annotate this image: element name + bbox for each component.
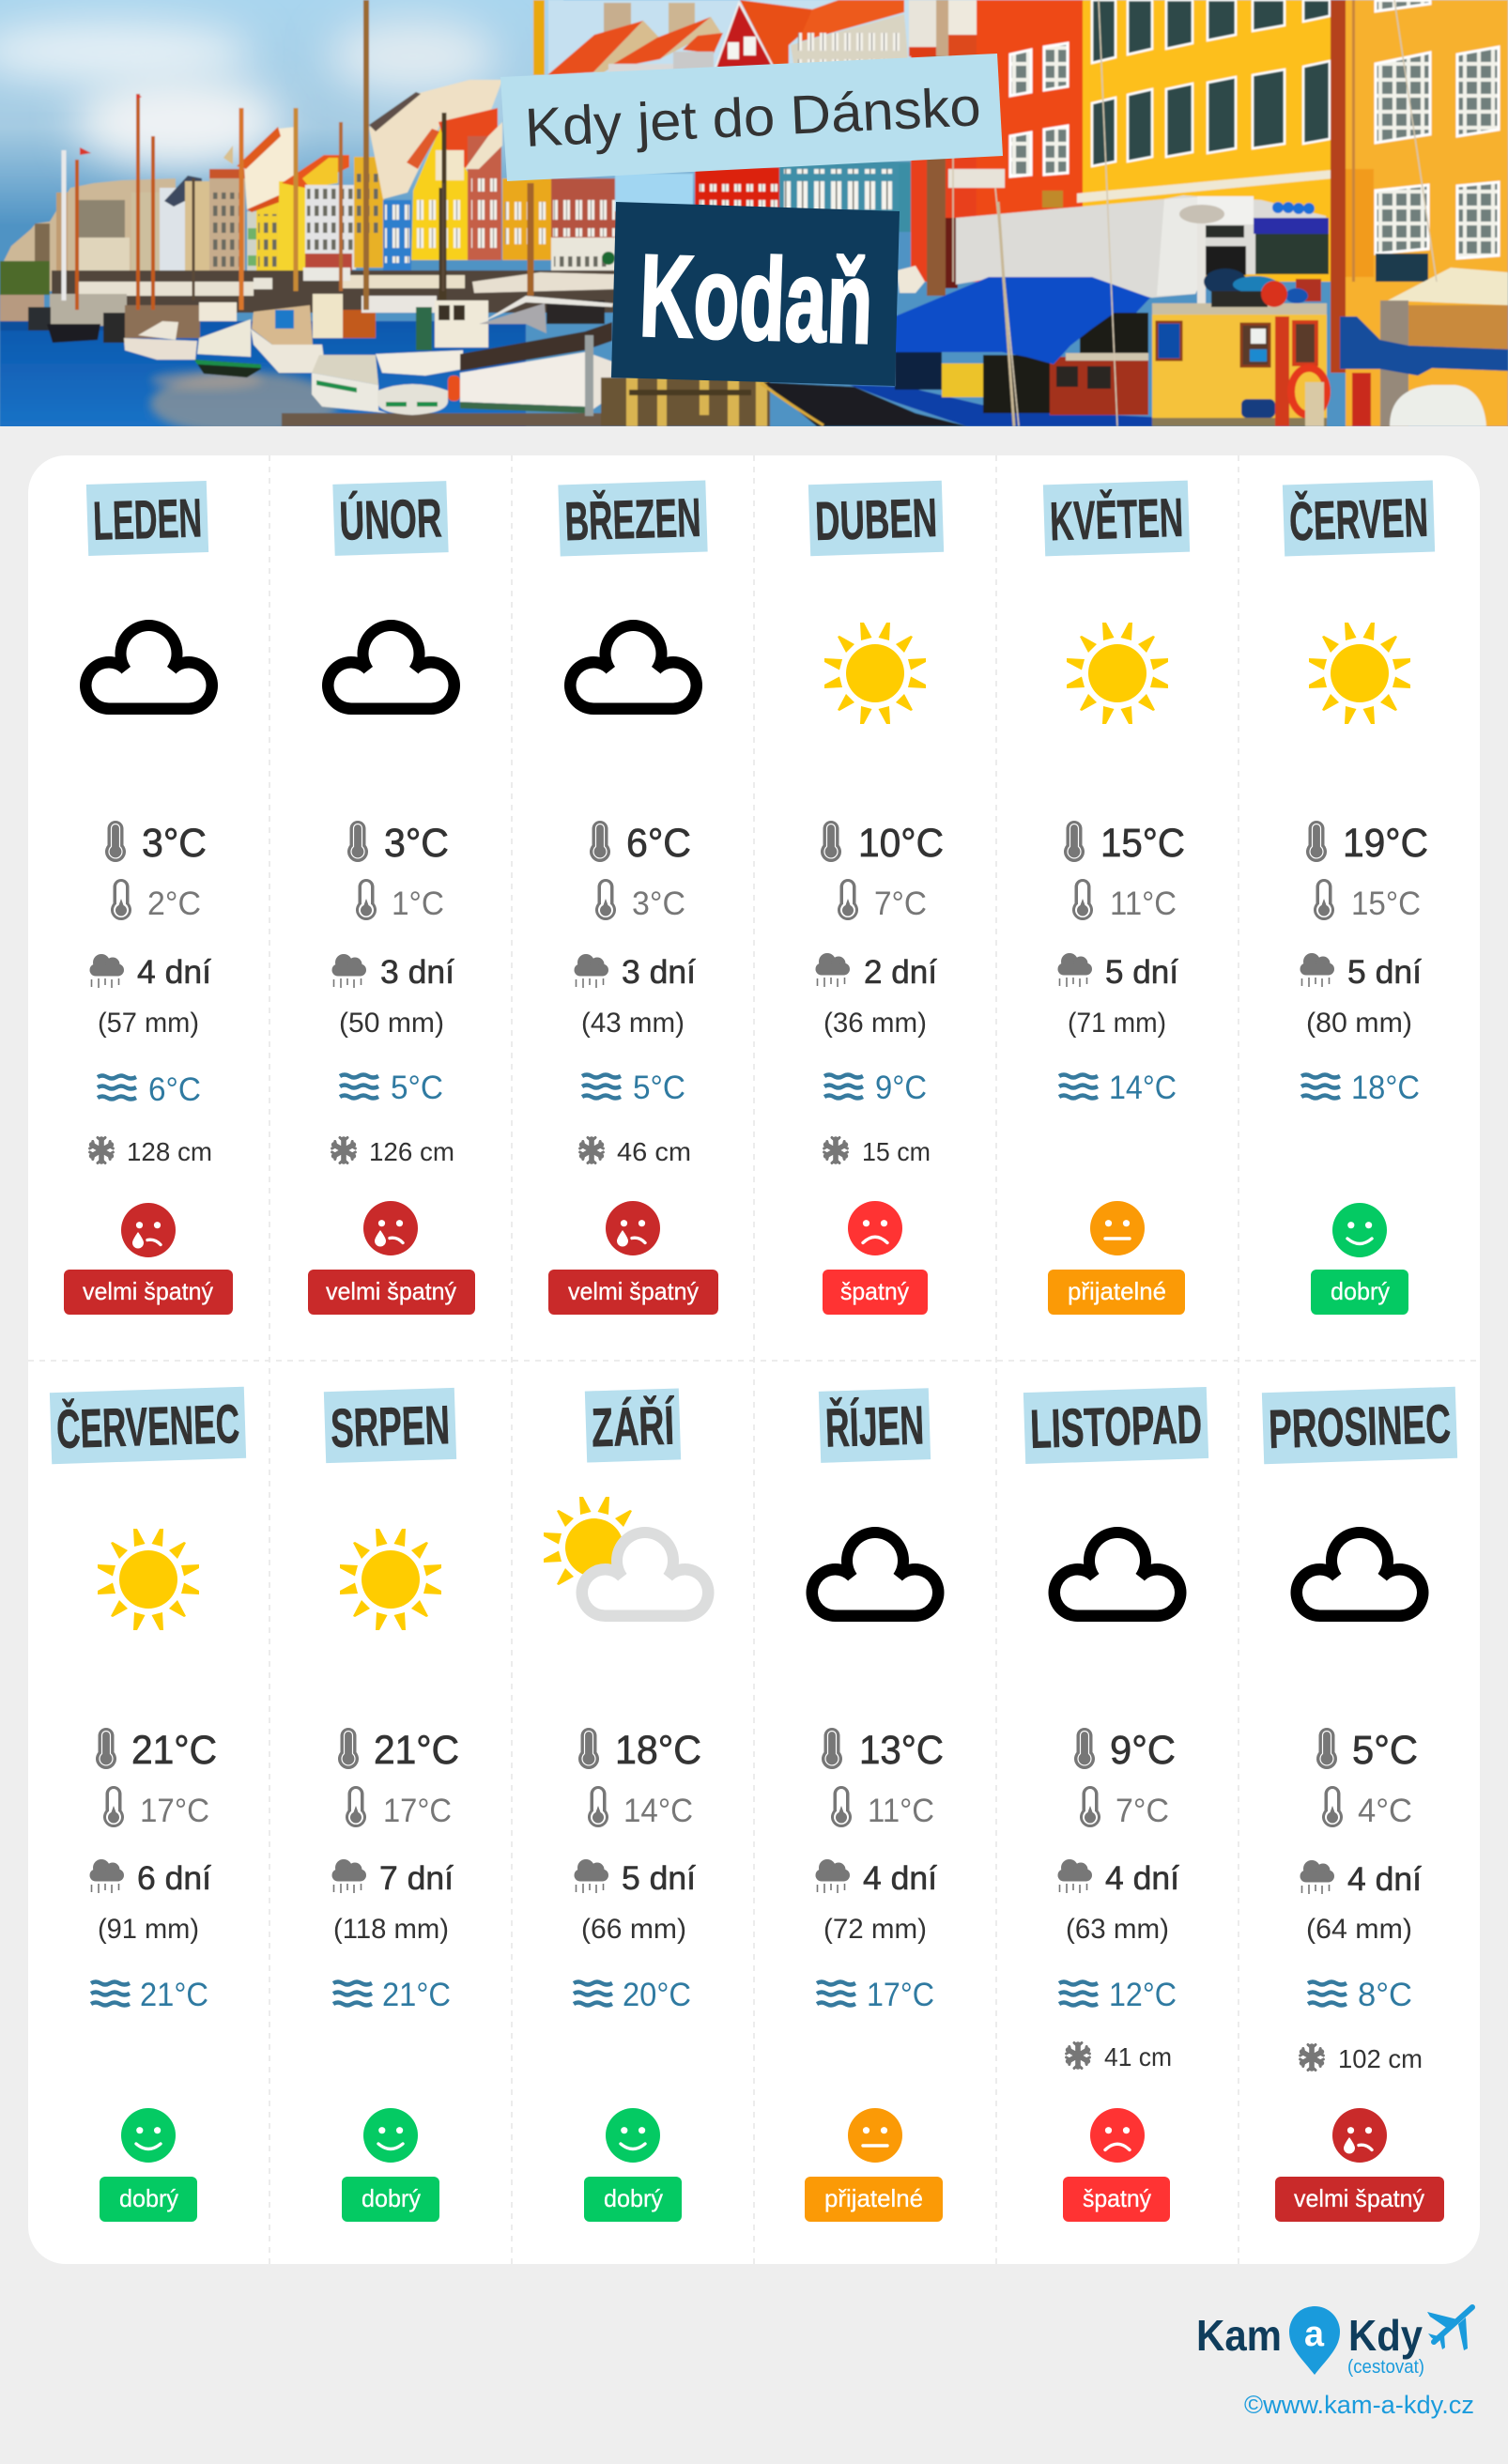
month label: [1043, 481, 1190, 556]
rating: [1063, 2108, 1170, 2222]
panel: Říjen: [805, 1388, 945, 2222]
rating: dobrý: [1331, 1277, 1390, 1305]
month label: KVĚTEN: [1049, 487, 1184, 552]
max temperature: 3°C: [384, 821, 449, 866]
icon: sun: [98, 1529, 199, 1630]
panel: Září: [544, 1388, 714, 2222]
water temperature: 21°C: [140, 1977, 208, 2013]
water temperature: 17°C: [867, 1977, 934, 2013]
min temperature: [1080, 1786, 1169, 1829]
rainfall: (118 mm): [333, 1914, 449, 1945]
rainy days: [90, 954, 211, 991]
min temperature: [103, 1786, 209, 1829]
max temperature: [821, 821, 944, 866]
max temperature: 10°C: [858, 821, 944, 866]
min temperature: [346, 1786, 452, 1829]
snow depth: 128 cm: [127, 1137, 212, 1166]
roof load: [1204, 269, 1247, 295]
min temperature: [588, 1786, 693, 1829]
rating: [100, 2108, 197, 2222]
water temperature: [1301, 1070, 1420, 1106]
snow depth: [824, 1137, 931, 1166]
umbrellas right: [1388, 268, 1508, 305]
rainy days: [815, 1859, 937, 1897]
white fender: [1390, 385, 1486, 426]
title box: Kodaň: Kodaň: [638, 231, 875, 368]
rating: [308, 1201, 475, 1315]
snow depth: 126 cm: [369, 1137, 454, 1166]
panel: Prosinec: [1262, 1387, 1457, 2222]
rainfall: (50 mm): [339, 1008, 444, 1039]
panel: Červenec: [50, 1387, 246, 2222]
logo: Kam a Kdy: [1196, 2306, 1472, 2378]
water temperature: 20°C: [623, 1977, 691, 2013]
water temperature: [582, 1070, 685, 1106]
max temperature: 18°C: [615, 1728, 701, 1773]
orange building: [1346, 0, 1508, 426]
month label: ČERVENEC: [55, 1394, 240, 1460]
rainy days: [90, 1859, 211, 1897]
icon: map pin: [1289, 2306, 1340, 2375]
rainfall: (91 mm): [98, 1914, 199, 1945]
rating: [584, 2108, 682, 2222]
max temperature: [105, 821, 207, 866]
water: [0, 321, 526, 434]
max temperature: 21°C: [131, 1728, 217, 1773]
max temperature: [590, 821, 691, 866]
icon: sun behind cloud: [544, 1497, 714, 1622]
rainy days: 4 dní: [1347, 1861, 1422, 1898]
min temperature: 1°C: [392, 886, 444, 922]
rating: dobrý: [119, 2184, 178, 2212]
water temperature: [1059, 1977, 1177, 2013]
rating: [1311, 1203, 1408, 1315]
rainy days: [332, 954, 454, 991]
month label: LISTOPAD: [1029, 1394, 1203, 1460]
rating: špatný: [840, 1277, 909, 1305]
roofs top middle: [548, 0, 924, 77]
rainy days: 5 dní: [622, 1860, 696, 1897]
rating: velmi špatný: [1294, 2184, 1424, 2212]
rainy days: [575, 1859, 696, 1897]
rainfall: (66 mm): [581, 1914, 686, 1945]
rainy days: 3 dní: [622, 954, 696, 991]
rating: velmi špatný: [326, 1277, 456, 1305]
month label: [1023, 1387, 1208, 1464]
rainy days: 2 dní: [864, 954, 937, 991]
rainfall: (71 mm): [1068, 1008, 1166, 1039]
min temperature: [838, 879, 927, 922]
max temperature: 5°C: [1352, 1728, 1418, 1773]
rainfall: (36 mm): [823, 1008, 927, 1039]
month label: [585, 1388, 681, 1463]
month label: [808, 481, 944, 556]
snow depth: 46 cm: [617, 1137, 691, 1166]
rainfall: (80 mm): [1306, 1008, 1412, 1039]
water temperature: 21°C: [382, 1977, 451, 2013]
max temperature: [96, 1728, 217, 1773]
yellow cabin: [1152, 313, 1327, 418]
month label: ÚNOR: [339, 487, 443, 552]
rainy days: [1057, 1859, 1179, 1897]
rainy days: [1300, 1860, 1422, 1898]
red building: [909, 54, 982, 284]
snow depth: [1300, 2044, 1423, 2073]
title label: Kdy jet do Dánsko: [500, 54, 1003, 181]
max temperature: [1316, 1728, 1418, 1773]
max temperature: [822, 1728, 944, 1773]
truck: [956, 195, 1329, 298]
min temperature: 17°C: [383, 1793, 452, 1829]
min temperature: 4°C: [1358, 1793, 1412, 1829]
panel: Listopad: [1023, 1387, 1208, 2222]
min temperature: [1072, 879, 1177, 922]
rainy days: [332, 1859, 454, 1897]
min temperature: [1314, 879, 1421, 922]
max temperature: [338, 1728, 459, 1773]
rainfall: (63 mm): [1066, 1914, 1169, 1945]
rainy days: 6 dní: [137, 1860, 211, 1897]
panel: Leden: [64, 481, 233, 1315]
snow depth: [90, 1137, 212, 1166]
water temperature: 12°C: [1109, 1977, 1177, 2013]
min temperature: 7°C: [874, 886, 927, 922]
yellow building: [1083, 0, 1352, 282]
month label: [1283, 481, 1435, 556]
title label: Kdy jet do Dánsko: Kdy jet do Dánsko: [524, 76, 982, 159]
water temperature: 14°C: [1109, 1070, 1177, 1106]
water temperature: 9°C: [875, 1070, 927, 1106]
max temperature: 3°C: [142, 821, 207, 866]
icon: sun: [824, 623, 926, 724]
month label: ŘÍJEN: [824, 1394, 925, 1459]
rainy days: 7 dní: [379, 1860, 454, 1897]
panel: Březen: [548, 481, 718, 1315]
icon: cloud: [806, 1527, 945, 1622]
month label: [819, 1388, 931, 1463]
min temperature: 15°C: [1351, 886, 1421, 922]
panel: Srpen: [324, 1388, 459, 2222]
rainfall: (64 mm): [1306, 1914, 1412, 1945]
max temperature: [347, 821, 449, 866]
month label: [50, 1387, 246, 1464]
icon: cloud: [1290, 1527, 1429, 1622]
snow depth: 41 cm: [1104, 2042, 1172, 2071]
water temperature: [1059, 1070, 1177, 1106]
rainfall: (57 mm): [98, 1008, 199, 1039]
min temperature: [1322, 1786, 1412, 1829]
big white boat: [479, 303, 546, 333]
water temperature: [574, 1977, 691, 2013]
blue tarps: [895, 277, 1150, 364]
icon: cloud: [1048, 1527, 1187, 1622]
water temperature: [1308, 1977, 1412, 2013]
water temperature: [817, 1977, 934, 2013]
rating: [805, 2108, 943, 2222]
logo: Kam a Kdy: Kdy: [1348, 2311, 1423, 2360]
panel: Únor: [308, 481, 475, 1315]
panel: Květen: [1043, 481, 1190, 1315]
rating: [64, 1203, 233, 1315]
rainy days: 4 dní: [1105, 1860, 1179, 1897]
month label: [86, 481, 208, 556]
max temperature: 9°C: [1110, 1728, 1176, 1773]
rating: dobrý: [604, 2184, 663, 2212]
rainfall: (72 mm): [823, 1914, 927, 1945]
water temperature: [824, 1070, 927, 1106]
header photo: Nyhavn harbour: [0, 0, 1508, 451]
min temperature: 14°C: [623, 1793, 693, 1829]
water temperature: [333, 1977, 451, 2013]
min temperature: [111, 879, 201, 922]
rating: [1048, 1201, 1185, 1315]
max temperature: [1306, 821, 1428, 866]
rating: [342, 2108, 439, 2222]
max temperature: 6°C: [626, 821, 691, 866]
min temperature: 7°C: [1116, 1793, 1169, 1829]
icon: map pin: a: [1304, 2315, 1325, 2354]
month label: SRPEN: [330, 1394, 451, 1459]
min temperature: 2°C: [147, 886, 201, 922]
white card panel: [28, 455, 1480, 2264]
rainy days: 4 dní: [137, 954, 211, 991]
water temperature: 6°C: [148, 1071, 201, 1108]
masts: [64, 0, 1437, 426]
rating: přijatelné: [1068, 1277, 1166, 1305]
max temperature: [578, 1728, 701, 1773]
max temperature: 13°C: [859, 1728, 944, 1773]
under tarp: [895, 352, 942, 390]
icon: sun: [1067, 623, 1168, 724]
month label: ZÁŘÍ: [591, 1395, 676, 1458]
rainy days: 5 dní: [1105, 954, 1178, 991]
month label: DUBEN: [814, 487, 938, 552]
rating: přijatelné: [824, 2184, 923, 2212]
max temperature: 21°C: [374, 1728, 459, 1773]
icon: cloud: [564, 620, 702, 715]
website url: ©www.kam-a-kdy.cz: [1244, 2391, 1474, 2419]
water temperature: [340, 1070, 443, 1106]
panel: Duben: [808, 481, 944, 1315]
icon: sun: [1309, 623, 1410, 724]
min temperature: [356, 879, 444, 922]
snow depth: [332, 1137, 454, 1166]
logo: Kam a Kdy: Kam: [1196, 2311, 1282, 2360]
max temperature: [1074, 1728, 1176, 1773]
rainy days: [815, 953, 937, 991]
under Kodaň: [601, 377, 770, 426]
rainy days: 4 dní: [863, 1860, 937, 1897]
min temperature: 17°C: [140, 1793, 209, 1829]
min temperature: 3°C: [632, 886, 685, 922]
max temperature: [1064, 821, 1185, 866]
rainy days: 5 dní: [1347, 954, 1422, 991]
month label: BŘEZEN: [564, 487, 702, 552]
icon: sun: [340, 1529, 441, 1630]
max temperature: 15°C: [1100, 821, 1185, 866]
icon: cloud: [80, 620, 218, 715]
rating: [1275, 2108, 1444, 2222]
water temperature: [91, 1977, 208, 2013]
snow depth: [1067, 2042, 1172, 2071]
water temperature: 8°C: [1358, 1977, 1412, 2013]
rating: [548, 1201, 718, 1315]
title box: Kodaň: [611, 202, 900, 386]
rating: špatný: [1083, 2184, 1151, 2212]
panel: Červen: [1283, 481, 1435, 1315]
rating: velmi špatný: [568, 1277, 699, 1305]
rating: [823, 1201, 928, 1315]
rating: dobrý: [362, 2184, 421, 2212]
water temperature: 5°C: [633, 1070, 685, 1106]
snow depth: 15 cm: [862, 1137, 931, 1166]
rainy days: 3 dní: [380, 954, 454, 991]
boats left: [50, 294, 127, 326]
min temperature: 11°C: [1110, 886, 1177, 922]
min temperature: 11°C: [868, 1793, 934, 1829]
rating: velmi špatný: [83, 1277, 213, 1305]
rainfall: (43 mm): [581, 1008, 685, 1039]
snow depth: 102 cm: [1338, 2044, 1423, 2073]
icon: airplane: [1427, 2307, 1472, 2350]
icon: cloud: [322, 620, 460, 715]
rainy days: [1300, 953, 1422, 991]
month label: [332, 481, 449, 556]
month label: LEDEN: [92, 487, 203, 552]
rainy days: [1057, 953, 1178, 991]
water temperature: [98, 1071, 201, 1108]
water temperature: 18°C: [1351, 1070, 1420, 1106]
rainy days: [575, 954, 696, 991]
dark hull: [763, 382, 967, 426]
month label: [558, 481, 708, 556]
max temperature: 19°C: [1343, 821, 1428, 866]
min temperature: [595, 879, 685, 922]
far town, left: [3, 178, 176, 291]
snow depth: [580, 1137, 691, 1166]
water temperature: 5°C: [391, 1070, 443, 1106]
logo: Kam a Kdy: (cestovat): [1347, 2357, 1424, 2378]
life ring: [1291, 368, 1327, 415]
min temperature: [831, 1786, 934, 1829]
month label: [324, 1388, 456, 1463]
